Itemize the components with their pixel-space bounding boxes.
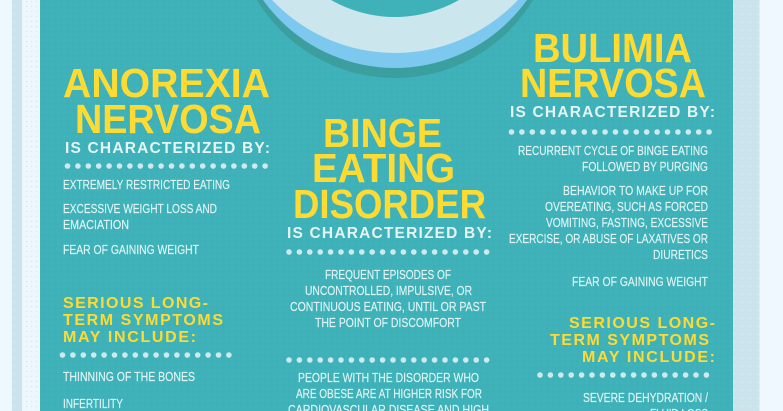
characteristics list: DIURETICS xyxy=(653,247,708,262)
panel: anorexia nervosa xyxy=(62,60,270,411)
characteristics list: EMACIATION xyxy=(63,217,129,232)
characteristics list: EXTREMELY RESTRICTED EATING xyxy=(63,177,230,192)
heading: anorexia nervosa: NERVOSA xyxy=(75,96,261,142)
heading: bulimia nervosa: NERVOSA xyxy=(520,60,706,106)
description: obesity risk: ARE OBESE ARE AT HIGHER RISK FOR xyxy=(296,386,482,401)
heading: bulimia nervosa: BULIMIA xyxy=(533,25,692,71)
description: frequent episodes: FREQUENT EPISODES OF xyxy=(325,267,451,282)
characteristics list: EXCESSIVE WEIGHT LOSS AND xyxy=(63,201,217,216)
description: frequent episodes xyxy=(290,267,486,330)
subheading: serious long-term symptoms xyxy=(550,315,715,366)
subheading: serious long-term symptoms: SERIOUS LONG- xyxy=(63,295,208,312)
description: frequent episodes: THE POINT OF DISCOMFORT xyxy=(315,315,461,330)
subheading: serious long-term symptoms: SERIOUS LONG- xyxy=(569,315,715,332)
description: obesity risk: PEOPLE WITH THE DISORDER WHO xyxy=(298,370,479,385)
heading: anorexia nervosa: ANOREXIA xyxy=(63,60,270,106)
heading: binge eating disorder xyxy=(293,110,486,227)
characteristics list: VOMITING, FASTING, EXCESSIVE xyxy=(546,215,708,230)
panel: bulimia nervosa xyxy=(509,25,715,411)
characteristics list: RECURRENT CYCLE OF BINGE EATING xyxy=(518,143,708,158)
ring graphic at top xyxy=(226,0,564,78)
subheading: serious long-term symptoms: MAY INCLUDE: xyxy=(582,349,715,366)
symptoms list: THINNING OF THE BONES xyxy=(63,369,195,384)
symptoms list: INFERTILITY xyxy=(63,396,123,411)
subheading: is characterized by: IS CHARACTERIZED BY: xyxy=(65,140,270,157)
heading: binge eating disorder: BINGE xyxy=(323,110,442,156)
symptoms list xyxy=(583,390,708,411)
panel: binge eating disorder xyxy=(287,110,492,411)
symptoms list xyxy=(63,369,195,411)
characteristics list xyxy=(509,143,708,289)
characteristics list: OVEREATING, SUCH AS FORCED xyxy=(545,199,708,214)
subheading: serious long-term symptoms xyxy=(63,295,223,346)
characteristics list: EXERCISE, OR ABUSE OF LAXATIVES OR xyxy=(509,231,708,246)
heading: binge eating disorder: EATING xyxy=(312,145,455,191)
heading: bulimia nervosa xyxy=(520,25,706,106)
symptoms list: SEVERE DEHYDRATION / xyxy=(583,390,708,405)
description: frequent episodes: UNCONTROLLED, IMPULSIVE, OR xyxy=(305,283,472,298)
heading: anorexia nervosa xyxy=(63,60,270,142)
heading: binge eating disorder: DISORDER xyxy=(293,181,486,227)
characteristics list: BEHAVIOR TO MAKE UP FOR xyxy=(563,183,708,198)
subheading: serious long-term symptoms: TERM SYMPTOMS xyxy=(63,312,223,329)
description: obesity risk xyxy=(288,370,489,411)
subheading: serious long-term symptoms: MAY INCLUDE: xyxy=(63,329,196,346)
characteristics list: FEAR OF GAINING WEIGHT xyxy=(63,242,199,257)
subheading: is characterized by: IS CHARACTERIZED BY: xyxy=(287,225,492,242)
characteristics list xyxy=(63,177,230,257)
subheading: is characterized by: IS CHARACTERIZED BY: xyxy=(510,104,715,121)
characteristics list: FEAR OF GAINING WEIGHT xyxy=(572,274,708,289)
description: frequent episodes: CONTINUOUS EATING, UNTIL OR PAST xyxy=(290,299,486,314)
characteristics list: FOLLOWED BY PURGING xyxy=(582,159,708,174)
subheading: serious long-term symptoms: TERM SYMPTOMS xyxy=(550,332,709,349)
